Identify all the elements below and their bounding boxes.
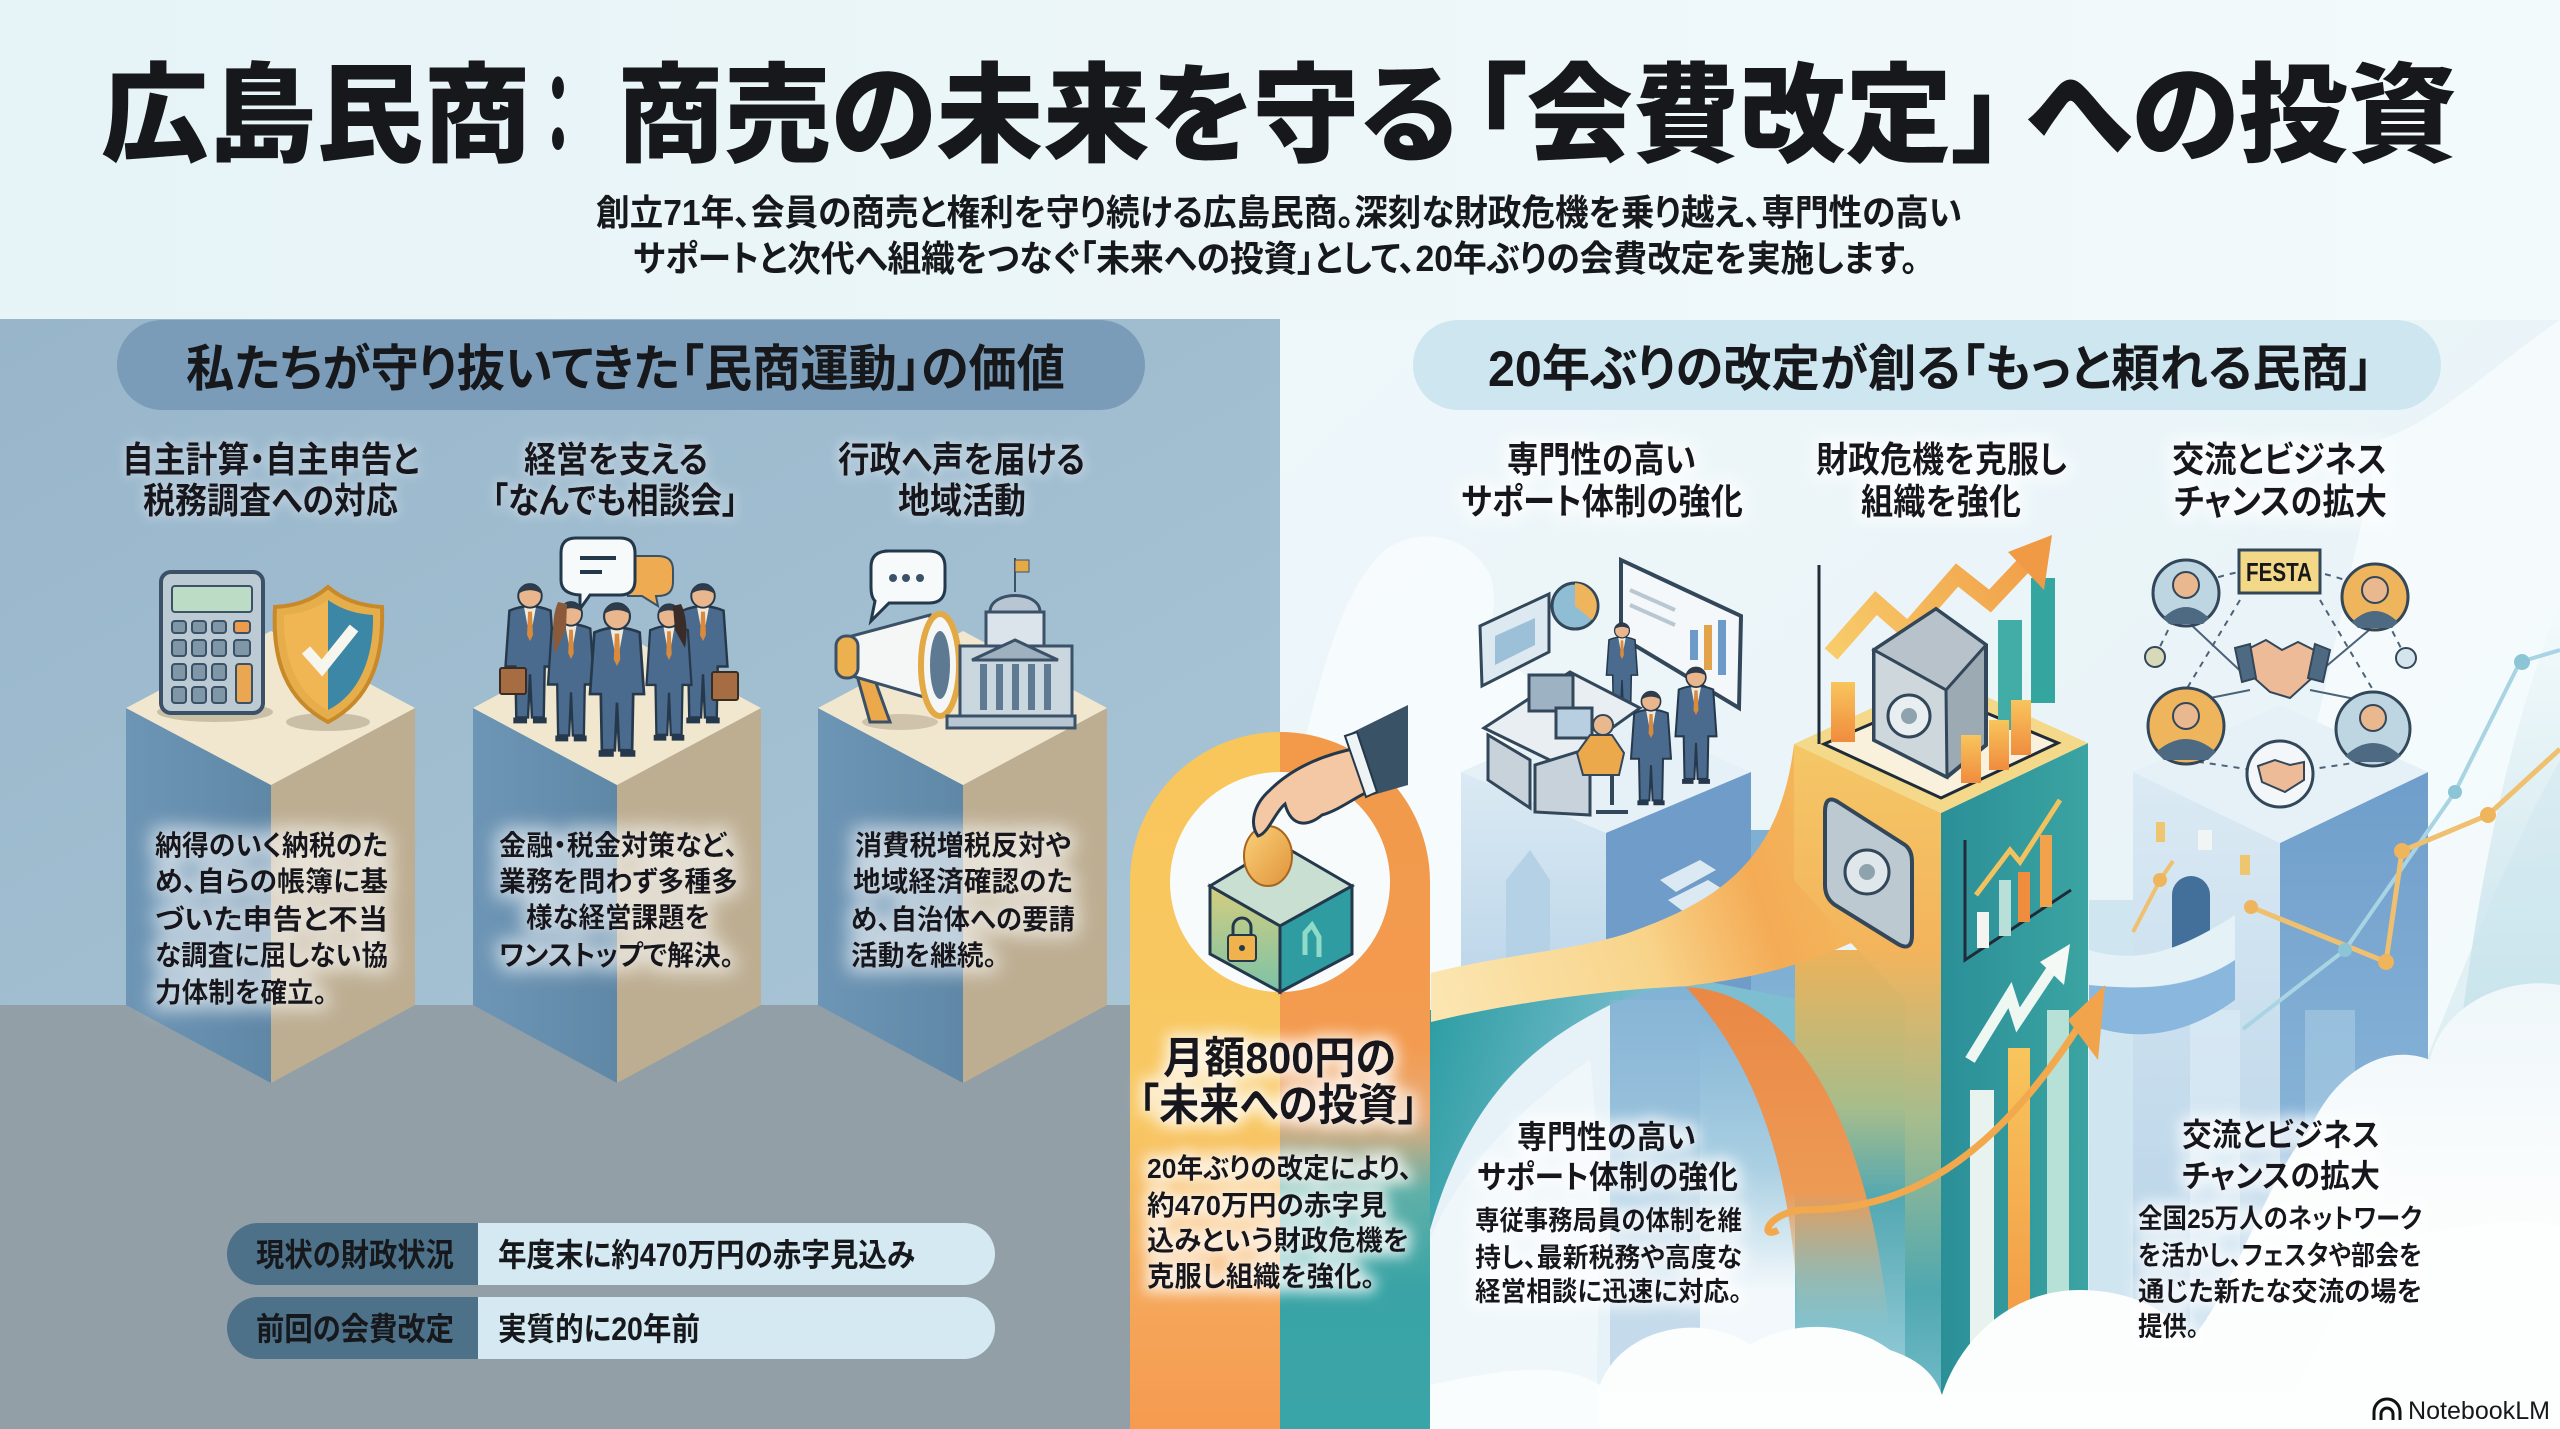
stat row: finances: 年度末に約470万円の赤字見込み [498, 1237, 915, 1273]
column 2: consultation [473, 439, 761, 1083]
column heading: finance: 財政危機を克服し [1816, 439, 2067, 480]
column heading: 税務調査への対応 [143, 480, 398, 521]
bottom bars [1970, 1010, 2069, 1429]
icon: calculator [157, 572, 273, 722]
panel: scenery right side [1280, 320, 2560, 1429]
column text [851, 830, 1075, 971]
title: 「会費改定」 [1473, 55, 2005, 176]
clouds [1430, 983, 2560, 1429]
central arch [1130, 705, 1430, 1429]
callout heading: 月額800円の [1163, 1034, 1396, 1083]
network column prism [2089, 705, 2428, 1429]
column heading [122, 439, 419, 521]
text block: exchange [2138, 1117, 2422, 1342]
icon: five business people [500, 584, 738, 757]
heading pill: right [1413, 320, 2441, 410]
heading pill: left [117, 320, 1145, 410]
text block: support [1475, 1119, 1742, 1307]
heading pill: right: 20年ぶりの改定が創る「もっと頼れる民商」 [1488, 341, 2373, 397]
column text: 金融・税金対策など、 [499, 830, 738, 861]
watermark: NotebookLM: NotebookLM [2408, 1397, 2550, 1425]
medallion circle [1170, 772, 1390, 992]
column heading: exchange: 交流とビジネス [2172, 439, 2387, 480]
text block: exchange: 提供。 [2138, 1312, 2199, 1342]
text block: exchange: 全国25万人のネットワーク [2138, 1204, 2422, 1234]
prism [126, 631, 415, 1083]
text block: exchange: チャンスの拡大 [2182, 1158, 2380, 1194]
text block: exchange: 通じた新たな交流の場を [2138, 1277, 2422, 1307]
column heading: finance [1816, 439, 2067, 522]
text block: support: サポート体制の強化 [1477, 1159, 1738, 1195]
column heading [838, 439, 1085, 521]
column text: 納得のいく納税のた [155, 830, 388, 861]
prism [473, 631, 761, 1083]
icon: government building [947, 558, 1075, 728]
icon: speech bubbles [561, 538, 673, 609]
icon: coin [1244, 826, 1292, 886]
column text: 活動を継続。 [851, 940, 997, 971]
stat row: last revision: 前回の会費改定 [256, 1311, 454, 1347]
callout text: 克服し組織を強化。 [1147, 1261, 1375, 1292]
icon: office scene [1480, 560, 1741, 815]
icon: donation box [1210, 844, 1352, 992]
stat row: last revision [227, 1297, 995, 1359]
subtitle: 創立71年、会員の商売と権利を守り続ける広島民商。深刻な財政危機を乗り越え、専門性の高い [596, 192, 1962, 233]
support column prism [1461, 708, 1751, 1080]
icon: wall safe [1825, 800, 1912, 947]
column text: な調査に屈しない協 [155, 940, 388, 971]
column heading: exchange [2172, 439, 2387, 522]
column text: め、自らの帳簿に基 [155, 866, 388, 897]
column heading: 行政へ声を届ける [838, 439, 1085, 480]
title: 広島民商 [101, 55, 531, 176]
prism [818, 631, 1107, 1083]
callout heading [1139, 1034, 1418, 1130]
column text [499, 830, 738, 971]
column text: め、自治体への要請 [851, 904, 1075, 935]
callout heading: 「未来への投資」 [1139, 1081, 1418, 1130]
callout text: 込みという財政危機を [1147, 1225, 1409, 1256]
stat row: last revision: 実質的に20年前 [498, 1311, 700, 1347]
column heading: 自主計算・自主申告と [122, 439, 419, 480]
stat row: finances [227, 1223, 995, 1285]
heading pill: left: 私たちが守り抜いてきた「民商運動」の価値 [186, 341, 1065, 397]
column text: 地域経済確認のた [853, 866, 1073, 897]
column text: 様な経営課題を [526, 902, 710, 933]
icon: megaphone [836, 614, 959, 730]
icon: shield [275, 587, 382, 731]
text block: exchange: を活かし、フェスタや部会を [2138, 1241, 2422, 1271]
column text: づいた申告と不当 [155, 904, 388, 935]
column text: ワンストップで解決。 [499, 940, 734, 971]
subtitle [596, 192, 1962, 279]
column heading: support: サポート体制の強化 [1461, 481, 1743, 522]
callout text: 約470万円の赤字見 [1147, 1190, 1387, 1221]
icon: wall chart [1965, 800, 2071, 960]
cloud behind hand [1300, 536, 1562, 1000]
handshake [2235, 640, 2330, 698]
panel: left [0, 319, 1280, 1429]
ribbon from arch to tower [1431, 744, 1905, 1022]
text block: support: 持し、最新税務や高度な [1475, 1243, 1742, 1273]
text block: exchange: 交流とビジネス [2182, 1117, 2380, 1153]
callout text [1147, 1153, 1412, 1292]
column text: 業務を問わず多種多 [499, 866, 738, 897]
lower blue columns [1461, 780, 1607, 1180]
stat row: finances: 現状の財政状況 [256, 1237, 454, 1273]
column heading: 「なんでも相談会」 [492, 480, 738, 521]
column heading: exchange: チャンスの拡大 [2174, 481, 2387, 522]
icon: hand [1254, 705, 1408, 836]
column heading: support: 専門性の高い [1507, 439, 1696, 480]
icon: speech bubble [871, 551, 945, 621]
icon: network with handshakes [2145, 550, 2416, 807]
column text: 消費税増税反対や [855, 830, 1071, 861]
chart lines right [2133, 650, 2560, 1029]
banner: FESTA [2239, 550, 2320, 593]
icon: safe and chart on tower [1831, 535, 2055, 783]
arrow: white rising [1970, 944, 2070, 1060]
text block: support: 経営相談に迅速に対応。 [1475, 1277, 1742, 1307]
column heading: finance: 組織を強化 [1861, 481, 2021, 522]
column 3: advocacy [818, 439, 1107, 1083]
text block: support: 専門性の高い [1517, 1119, 1696, 1155]
title [101, 55, 2457, 176]
title: 商売の未来を守る [617, 55, 1458, 176]
arrow: orange rising curve [1768, 985, 2105, 1232]
text block: support: 専従事務局員の体制を維 [1475, 1206, 1742, 1236]
stairs [1660, 860, 1742, 954]
title: への投資 [2025, 55, 2457, 176]
title: ： [544, 55, 572, 176]
column heading: support [1461, 439, 1743, 522]
column 1: tax [122, 439, 419, 1083]
arch under ribbon [1430, 950, 1943, 1429]
banner: FESTA: FESTA [2246, 557, 2312, 587]
tower [1794, 565, 2088, 1429]
callout text: 20年ぶりの改定により、 [1147, 1153, 1412, 1184]
column text [155, 830, 388, 1008]
column text: 力体制を確立。 [155, 977, 327, 1008]
column heading: 地域活動 [898, 480, 1026, 521]
column heading: 経営を支える [524, 439, 708, 480]
column heading [492, 439, 738, 521]
subtitle: サポートと次代へ組織をつなぐ「未来への投資」として、20年ぶりの会費改定を実施します。 [633, 238, 1918, 279]
